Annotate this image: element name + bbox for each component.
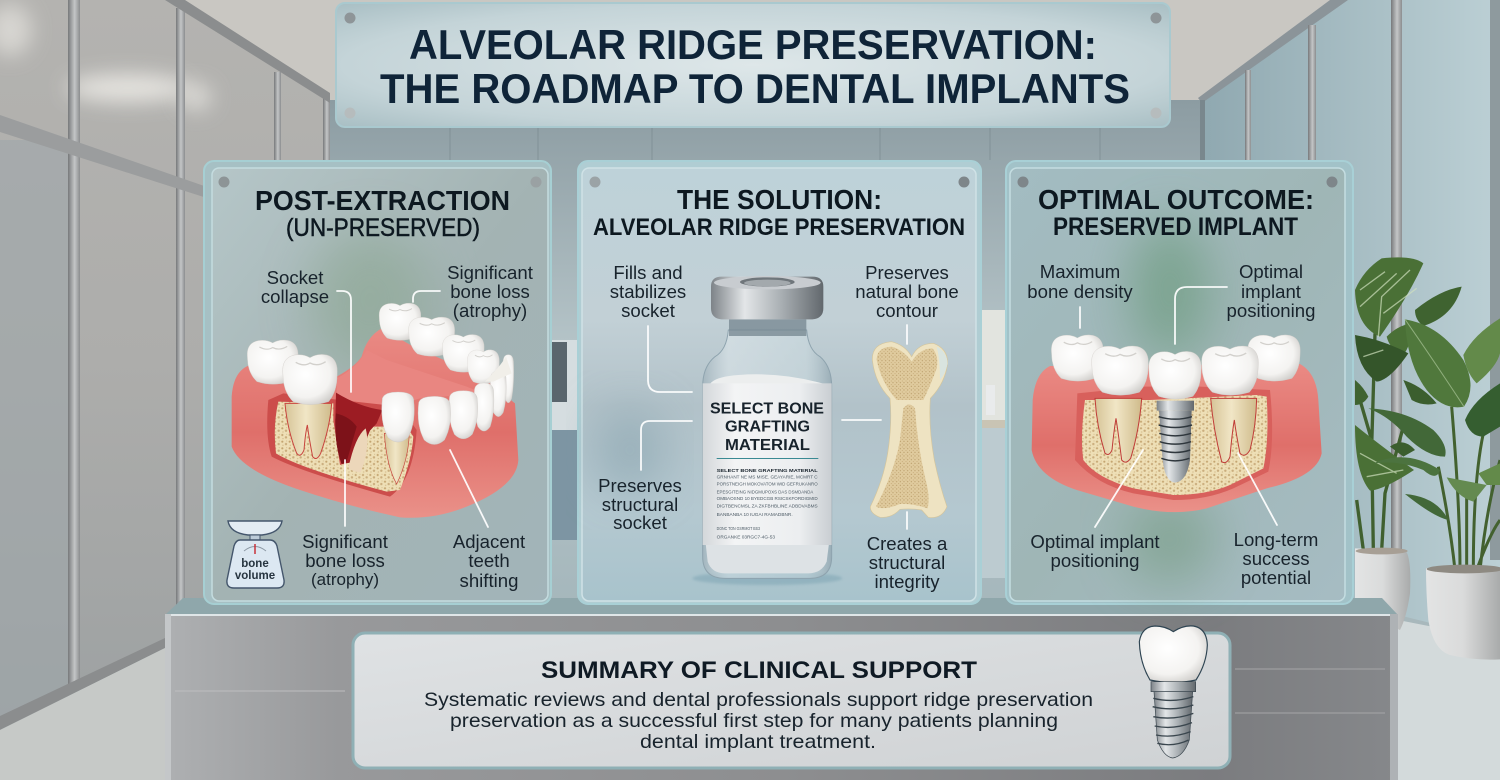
label: positioning top: Optimal [1239, 261, 1303, 282]
label: bone density: bone density [1027, 281, 1133, 302]
vial label: DIGTBENCMSL ZA ZKFBHBLINE ADBDVABMS [717, 504, 818, 509]
section cut [267, 393, 417, 497]
icon: bone volume scale: bone [241, 558, 269, 570]
bone illustration [870, 342, 948, 518]
label: teeth shifting: shifting [460, 570, 518, 591]
label: bone loss bottom: bone loss [305, 550, 385, 571]
canine root [384, 433, 409, 484]
summary text: preservation as a successful first step for many patients planning [450, 710, 1058, 732]
left floor [0, 648, 165, 780]
cap [711, 277, 823, 319]
title text: THE ROADMAP TO DENTAL IMPLANTS [380, 65, 1130, 112]
vial of bone grafting material [692, 276, 842, 585]
heading: OPTIMAL OUTCOME: [1038, 184, 1314, 215]
heading [255, 185, 510, 242]
crowns [1092, 346, 1258, 399]
label: positioning bottom: positioning [1051, 550, 1139, 571]
left frosted glass wall [0, 0, 330, 725]
summary text: dental implant treatment. [640, 731, 876, 753]
label: positioning top: positioning [1227, 300, 1315, 321]
label: fills and stabilizes: stabilizes [610, 281, 686, 302]
label: bone loss top: (atrophy) [453, 300, 527, 321]
heading: POST-EXTRACTION [255, 185, 510, 216]
label: preserves socket: structural [602, 494, 678, 515]
panel: optimal outcome [1006, 161, 1353, 604]
summary text: Systematic reviews and dental professionals support ridge preservation [424, 689, 1093, 711]
vial label: EPESGITEING NIDGMUPOXS DAS DSMDANDA [717, 489, 813, 494]
icon: dental implant [1139, 626, 1207, 758]
label: preserves socket: socket [613, 512, 668, 533]
back molars [1051, 335, 1300, 381]
label: fills and stabilizes: Fills and [613, 262, 683, 283]
label: structural integrity: structural [869, 552, 945, 573]
front teeth [382, 355, 514, 444]
jaw illustration: collapsed socket [232, 303, 518, 518]
label: long-term success: success [1242, 548, 1310, 569]
label: socket collapse: Socket [267, 267, 323, 288]
label: bone loss top: bone loss [450, 281, 530, 302]
gap details [551, 340, 579, 430]
label: socket collapse: collapse [261, 286, 329, 307]
right wall glass [1200, 0, 1500, 640]
title text: ALVEOLAR RIDGE PRESERVATION: [409, 21, 1097, 68]
heading [1038, 184, 1314, 241]
label: fills and stabilizes: socket [621, 300, 676, 321]
panel: the solution [578, 161, 981, 604]
heading: THE SOLUTION: [677, 184, 882, 215]
vial label: GRAFTING [725, 419, 810, 436]
label: long-term success: Long-term [1234, 529, 1318, 550]
vial label: BANBANBA 10 IUGAI RAMADBNR. [717, 512, 793, 517]
label: positioning bottom: Optimal implant [1030, 531, 1160, 552]
molar root [285, 403, 332, 459]
summary heading: SUMMARY OF CLINICAL SUPPORT [541, 657, 977, 684]
label: long-term success: potential [1241, 567, 1311, 588]
label: bone loss bottom: (atrophy) [311, 570, 379, 589]
label: preserves socket: Preserves [598, 475, 682, 496]
leader lines [1080, 287, 1277, 527]
heading: (UN-PRESERVED) [286, 214, 480, 242]
vial label: GRNHANT NE MS MISE. GEAYARIE, MCMRT C [717, 474, 818, 479]
ceiling [165, 0, 1345, 100]
plants in pots [1355, 257, 1500, 660]
window frames [68, 0, 80, 690]
label: structural integrity: integrity [874, 571, 940, 592]
heading: ALVEOLAR RIDGE PRESERVATION [593, 214, 965, 241]
label: teeth shifting: Adjacent [453, 531, 525, 552]
label: bone density: Maximum [1040, 261, 1120, 282]
icon: bone volume scale [227, 521, 284, 588]
vial label: DONC TON GSRMOT BS3 [717, 526, 760, 531]
panel: post-extraction [204, 161, 551, 604]
leader lines [641, 325, 907, 529]
leader lines [337, 291, 488, 527]
vial label [703, 383, 832, 545]
vial label: OMBAOSND 10 BYEDCGB RSICSKFORDIGMID [717, 496, 818, 501]
section cut [1075, 387, 1272, 500]
front plant [1368, 318, 1500, 570]
vial label: SELECT BONE GRAFTING MATERIAL [717, 468, 818, 473]
label: bone loss bottom: Significant [302, 531, 388, 552]
title text [380, 21, 1130, 112]
label: teeth shifting: teeth [468, 550, 510, 571]
label: structural integrity: Creates a [867, 533, 947, 554]
label: preserves contour: Preserves [865, 262, 949, 283]
back pot [1355, 548, 1410, 630]
label: preserves contour: natural bone [855, 281, 959, 302]
vial label: MATERIAL [725, 437, 810, 454]
summary text [424, 689, 1093, 753]
panel: summary of clinical support [353, 626, 1230, 768]
heading [593, 184, 965, 241]
label: preserves contour: contour [876, 300, 938, 321]
back plant [1355, 257, 1462, 550]
implant screw [1157, 401, 1194, 483]
vial label: PORSTNEIGH MOKOVATOM WID GEFRUKANRO [717, 482, 818, 487]
label: positioning top: implant [1241, 281, 1302, 302]
natural tooth roots [1095, 398, 1142, 462]
front pot [1426, 565, 1500, 660]
empty socket [335, 393, 382, 464]
back wall [330, 100, 1200, 620]
steel pedestal [165, 598, 1398, 780]
right floor [1398, 620, 1500, 780]
powder [710, 374, 824, 384]
jaw illustration: implant [1032, 335, 1322, 512]
icon: bone volume scale: volume [235, 570, 275, 582]
vial label: SELECT BONE [710, 400, 824, 417]
title plaque [336, 3, 1170, 127]
back teeth [247, 303, 499, 384]
label: bone loss top: Significant [447, 262, 533, 283]
vial label: ORGANKE 03RGC7-4G-53 [717, 535, 776, 540]
heading: PRESERVED IMPLANT [1053, 213, 1298, 241]
